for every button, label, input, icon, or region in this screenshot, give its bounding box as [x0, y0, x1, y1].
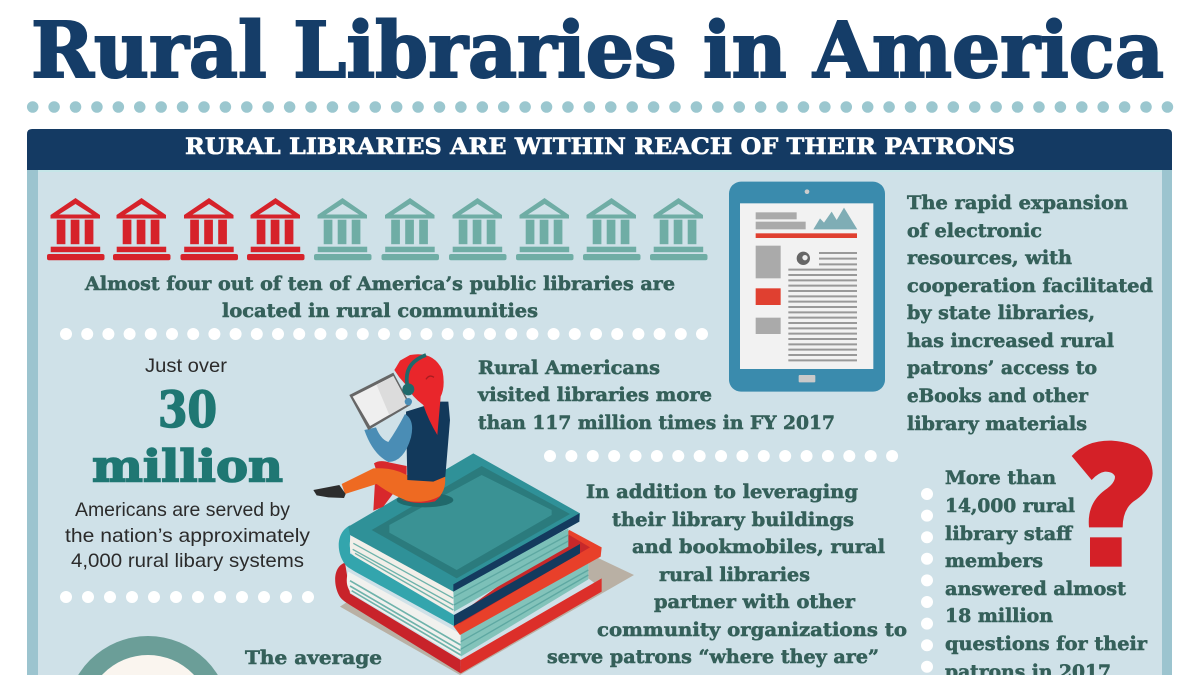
icon: library teal 6 — [382, 198, 439, 260]
icon: library teal 10 — [650, 198, 708, 260]
text: electronic resources: resources, with — [907, 247, 1072, 269]
section header bar — [27, 129, 1172, 170]
text: partnerships: serve patrons “where they are” — [547, 646, 879, 668]
text: electronic resources: The rapid expansion — [907, 192, 1128, 214]
teal book — [339, 453, 580, 626]
text: staff questions: answered almost — [945, 578, 1126, 600]
stat: 30 million Americans: Just over — [145, 355, 228, 377]
reader figure — [313, 354, 453, 511]
text: four out of ten: Almost four out of ten of America’s public libraries are — [84, 273, 675, 295]
text: 117 million visits — [477, 357, 835, 434]
pictogram: ten library buildings, four red — [47, 198, 708, 260]
text: electronic resources: library materials — [907, 413, 1087, 435]
title: Rural Libraries in America — [31, 6, 1164, 96]
text: electronic resources: has increased rural — [907, 330, 1114, 352]
text: partnerships: their library buildings — [612, 509, 854, 531]
text: 117 million visits: than 117 million times in FY 2017 — [478, 412, 835, 434]
text: partnerships — [547, 481, 907, 668]
text: 117 million visits: Rural Americans — [478, 357, 660, 379]
text: staff questions: questions for their — [945, 633, 1148, 655]
stat: 30 million Americans: 4,000 rural libary systems — [71, 550, 304, 572]
text: staff questions: library staff — [945, 523, 1073, 545]
text: staff questions: 14,000 rural — [945, 495, 1075, 517]
icon: library red 3 — [180, 198, 238, 260]
book shadow — [340, 553, 634, 675]
text: four out of ten — [84, 273, 675, 322]
text: staff questions: 18 million — [945, 605, 1053, 627]
text: partnerships: In addition to leveraging — [586, 481, 858, 503]
text: partnerships: community organizations to — [597, 619, 907, 641]
text: partnerships: rural libraries — [659, 564, 810, 586]
text: electronic resources — [907, 192, 1153, 435]
text: staff questions: members — [945, 550, 1043, 572]
stat: 30 million Americans: the nation’s approximately — [65, 525, 310, 547]
text: the average: The average — [245, 647, 382, 669]
icon: circular badge — [66, 636, 230, 675]
text: partnerships: and bookmobiles, rural — [632, 536, 885, 558]
illustration: reader on stacked books — [313, 354, 634, 675]
text: electronic resources: patrons’ access to — [907, 357, 1097, 379]
text: staff questions: More than — [945, 467, 1056, 489]
section header bar: RURAL LIBRARIES ARE WITHIN REACH OF THEIR PATRONS — [185, 134, 1015, 160]
icon: library teal 8 — [516, 198, 574, 260]
icon: library red 1 — [47, 198, 104, 260]
panel: rural libraries are within reach — [27, 129, 1172, 675]
icon: library teal 5 — [314, 198, 372, 260]
stat: 30 million Americans: 30 — [158, 380, 217, 439]
text: staff questions — [945, 467, 1148, 675]
text: electronic resources: of electronic — [907, 220, 1042, 242]
stat: 30 million Americans — [65, 355, 310, 572]
text: four out of ten: located in rural communities — [222, 300, 538, 322]
icon: library red 4 — [247, 198, 304, 260]
text: electronic resources: by state libraries, — [907, 302, 1095, 324]
text: electronic resources: cooperation facilitated — [907, 275, 1153, 297]
icon: library red 2 — [113, 198, 170, 260]
text: electronic resources: eBooks and other — [907, 385, 1089, 407]
stat: 30 million Americans: Americans are served by — [75, 499, 290, 521]
red book — [335, 530, 602, 673]
icon: library teal 7 — [449, 198, 506, 260]
icon: tablet — [729, 182, 885, 392]
text: partnerships: partner with other — [654, 591, 856, 613]
stat: 30 million Americans: million — [92, 442, 283, 492]
icon: question mark — [1072, 441, 1153, 567]
text: 117 million visits: visited libraries more — [477, 384, 712, 406]
icon: library teal 9 — [583, 198, 640, 260]
